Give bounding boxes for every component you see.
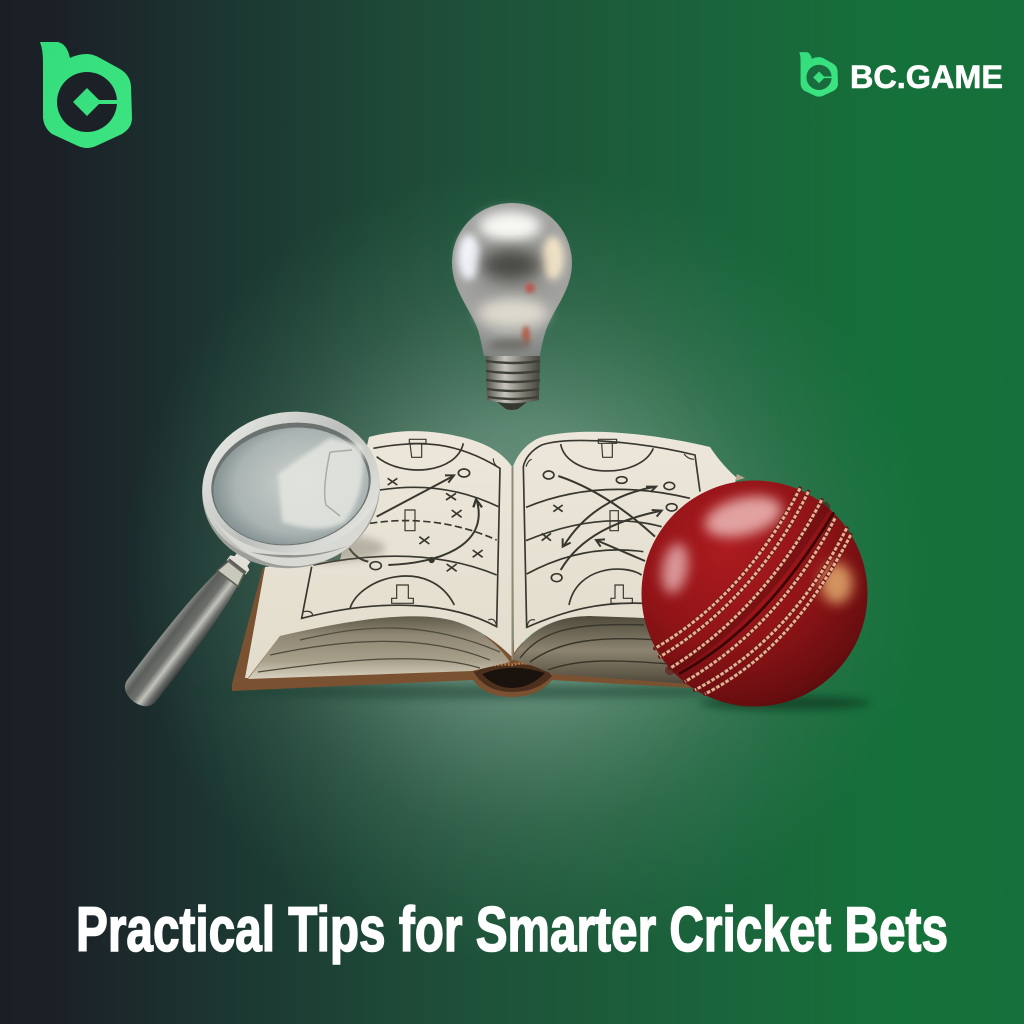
- logo: BC.GAME wordmark: [799, 52, 1003, 97]
- ball seam and stitching: [655, 488, 851, 694]
- open book with tactics diagrams: [200, 431, 745, 699]
- bulb screw base: [486, 356, 540, 410]
- magnifier shadow on page: [265, 534, 385, 562]
- book cover: [232, 567, 690, 697]
- cricket ball: [642, 480, 870, 710]
- spine fold: [512, 467, 514, 660]
- right page: [513, 432, 737, 653]
- magnifier lens: [206, 418, 376, 554]
- ground shadow: [200, 685, 740, 699]
- left page: [245, 431, 512, 678]
- bulb globe: [452, 203, 572, 356]
- ball highlights: [658, 489, 853, 604]
- icon: BC logo mark small: [799, 52, 838, 97]
- left tactics diagram: [302, 439, 500, 627]
- icon: BC logo mark large: [40, 42, 132, 148]
- magnifier rim: [192, 400, 390, 580]
- lens reflection of page: [278, 438, 363, 528]
- magnifier handle: [119, 542, 260, 712]
- right page stack: [514, 616, 690, 684]
- ball sphere: [642, 480, 868, 706]
- right tactics diagram: [523, 439, 700, 627]
- icon: silver light bulb: [452, 203, 572, 410]
- brand name: BC.GAME: [850, 59, 1003, 95]
- icon: magnifying glass: [119, 400, 390, 712]
- left page stack: [248, 616, 510, 679]
- ball ground shadow: [700, 696, 870, 710]
